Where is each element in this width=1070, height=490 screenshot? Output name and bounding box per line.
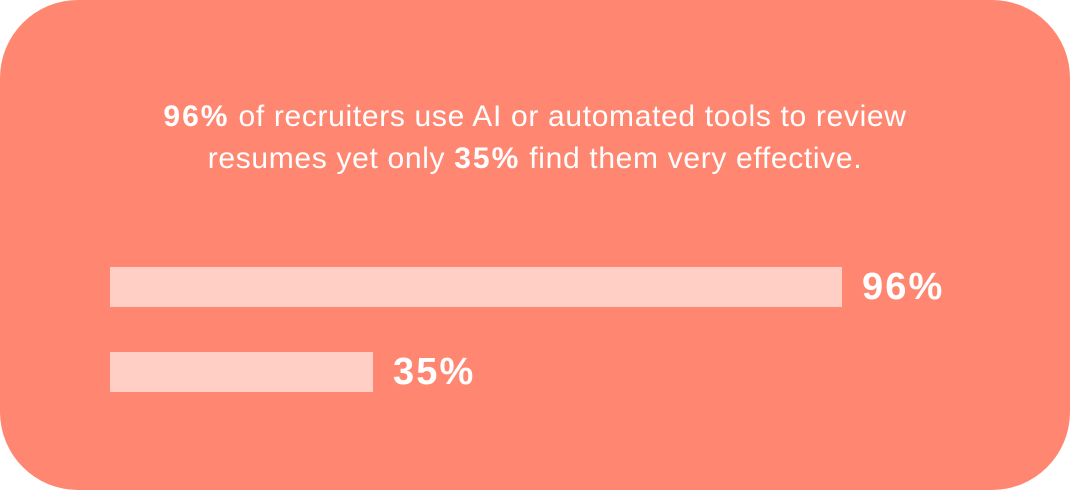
bar chart [110, 266, 944, 393]
label: 96%: 96% [862, 266, 944, 308]
heading text: resumes yet only 35% find them very effective. [208, 142, 862, 175]
heading text: 96% of recruiters use AI or automated tools to review [163, 100, 907, 133]
heading text [163, 100, 907, 175]
label: 35%: 35% [393, 351, 475, 393]
bar: 35% [110, 352, 373, 392]
bar: 96% [110, 267, 842, 307]
